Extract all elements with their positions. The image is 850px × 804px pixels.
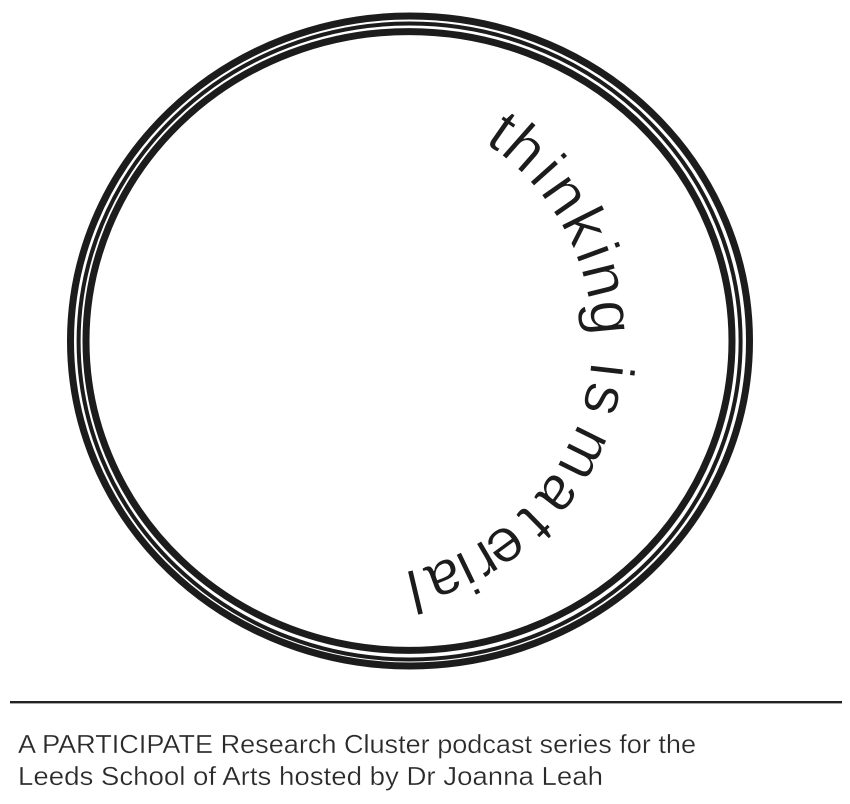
- horizontal divider rule: [10, 701, 842, 703]
- curved title: thinking is material: thinking is material: [408, 114, 635, 615]
- caption text: [18, 729, 696, 791]
- triple ring circle: [70, 16, 750, 666]
- caption line 1: A PARTICIPATE Research Cluster podcast series for the: [18, 729, 696, 759]
- caption line 2: Leeds School of Arts hosted by Dr Joanna Leah: [18, 761, 603, 791]
